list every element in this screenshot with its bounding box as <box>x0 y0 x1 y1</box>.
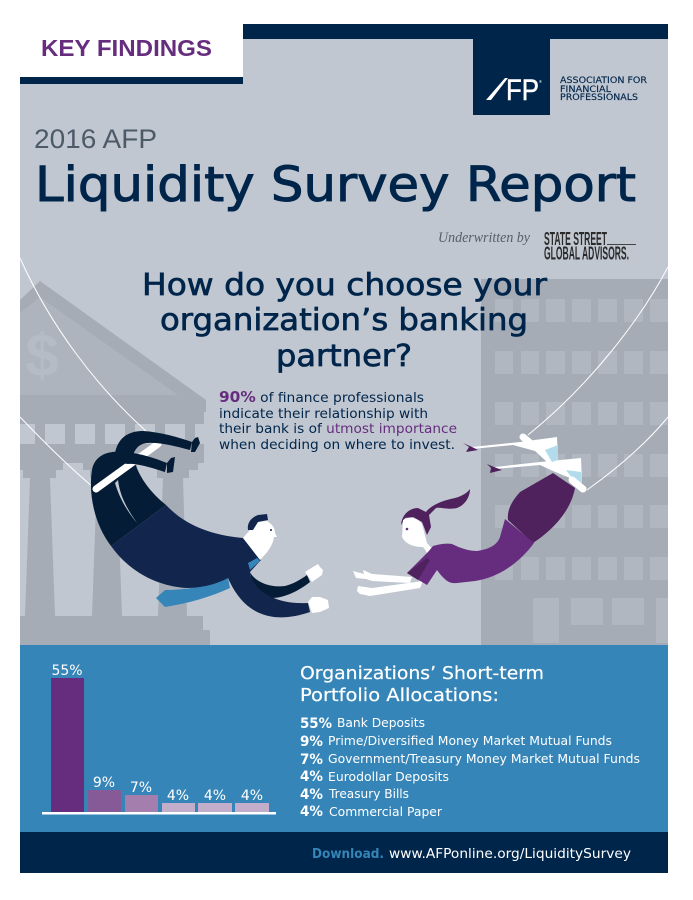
head <box>402 518 435 557</box>
sponsor line: Underwritten by <box>438 230 531 246</box>
chart heading <box>300 664 544 706</box>
bar chart: 9% <box>93 775 115 791</box>
eye <box>406 528 408 530</box>
hands <box>305 564 323 582</box>
logo: AFP <box>473 39 647 115</box>
bar chart: 55% <box>51 663 83 679</box>
footer: download <box>20 832 668 873</box>
question heading: partner? <box>276 339 412 374</box>
illustration: woman on trapeze <box>353 437 583 596</box>
panel: portfolio allocations <box>20 645 668 832</box>
trousers <box>91 452 166 546</box>
bar chart: 4% <box>167 788 189 804</box>
jacket <box>111 505 310 617</box>
question heading <box>142 268 548 374</box>
logo: AFP: FP <box>506 74 539 107</box>
arms <box>353 570 412 583</box>
allocation list: Prime/Diversified Money Market Mutual Funds <box>328 733 612 748</box>
illustration: man on trapeze <box>91 431 329 617</box>
allocation list: 4% <box>300 769 323 785</box>
tie knot <box>248 558 260 570</box>
logo: AFP: FINANCIAL <box>560 85 611 95</box>
white top-left tab <box>20 24 243 77</box>
callout: 90% statistic: indicate their relationship with <box>219 406 428 422</box>
allocation list: Treasury Bills <box>328 786 409 801</box>
allocation list <box>300 715 640 820</box>
trapeze bar <box>96 444 158 489</box>
allocation list: Bank Deposits <box>337 715 425 730</box>
legs <box>472 437 558 462</box>
logo: AFP: ® <box>539 79 542 84</box>
callout: 90% statistic: their bank is of utmost importance <box>219 421 457 437</box>
footer: download: Download. <box>312 846 384 862</box>
back arm <box>250 572 310 598</box>
tie <box>156 578 230 607</box>
head <box>243 521 277 560</box>
allocation list: 7% <box>300 752 323 768</box>
shoes <box>191 437 200 452</box>
icon: dollar sign: $ <box>25 322 59 389</box>
illustration: bank building <box>20 281 210 645</box>
question heading: organization’s banking <box>160 303 528 338</box>
panel: grey background <box>20 24 668 645</box>
bar chart <box>42 663 276 814</box>
allocation list: 55% <box>300 716 332 732</box>
sponsor line: STATE STREET <box>544 229 607 249</box>
bar chart: 4% <box>241 788 263 804</box>
chart heading: Portfolio Allocations: <box>300 686 499 706</box>
callout: 90% statistic: 90% of finance professionals <box>219 388 424 406</box>
illustration: office tower <box>481 279 668 645</box>
socks <box>545 445 558 462</box>
sleeve <box>407 558 430 580</box>
shoes <box>463 443 478 452</box>
navy rule under tab <box>20 77 243 84</box>
chart heading: Organizations’ Short-term <box>300 664 544 684</box>
hair tail <box>401 489 470 535</box>
callout: 90% statistic <box>219 388 457 453</box>
trapeze bar <box>523 437 583 489</box>
allocation list: Eurodollar Deposits <box>328 769 449 784</box>
hair <box>248 514 268 530</box>
bar chart: 4% <box>204 788 226 804</box>
top navy bar <box>243 24 668 39</box>
allocation list: Commercial Paper <box>329 804 443 819</box>
allocation list: Government/Treasury Money Market Mutual Funds <box>328 751 640 766</box>
callout: 90% statistic: when deciding on where to invest. <box>219 437 455 453</box>
logo: AFP: PROFESSIONALS <box>560 93 638 103</box>
logo: AFP: ASSOCIATION FOR <box>560 76 647 86</box>
lower legs <box>112 452 167 472</box>
footer: download: www.AFPonline.org/LiquiditySurvey <box>389 846 631 862</box>
allocation list: 9% <box>300 734 323 750</box>
eye <box>270 529 272 531</box>
bar chart: 7% <box>130 780 152 796</box>
allocation list: 4% <box>300 804 323 820</box>
top <box>407 519 534 585</box>
sponsor line <box>438 229 636 264</box>
gap between legs <box>115 480 137 523</box>
subtitle: 2016 AFP: 2016 AFP <box>34 124 157 154</box>
allocation list: 4% <box>300 787 323 803</box>
trapeze ropes <box>20 258 668 490</box>
question heading: How do you choose your <box>142 268 548 303</box>
heading: key findings: KEY FINDINGS <box>41 35 212 61</box>
title: Liquidity Survey Report <box>35 157 636 213</box>
trousers <box>508 473 575 543</box>
